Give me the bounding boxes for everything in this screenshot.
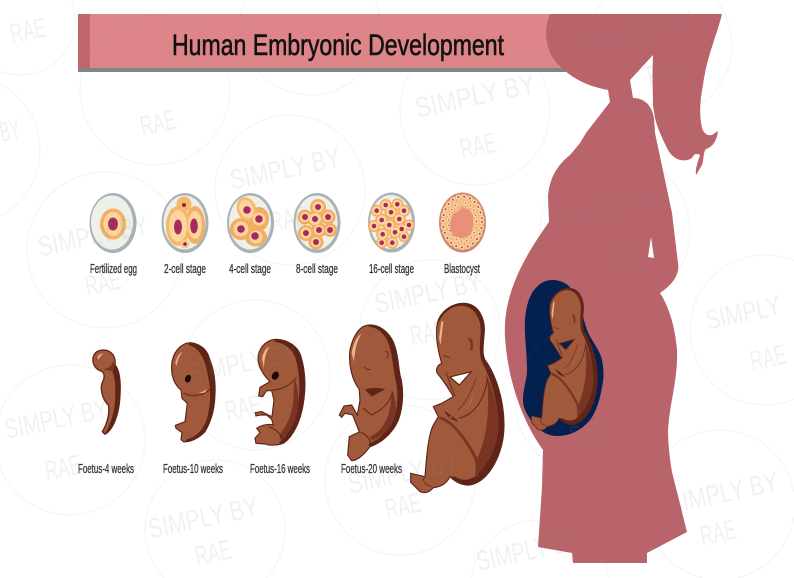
label: 16-cell stage bbox=[369, 262, 414, 276]
egg: 4-cell bbox=[227, 193, 274, 276]
watermarks: RAE bbox=[382, 487, 424, 525]
egg: 8-cell bbox=[294, 193, 340, 276]
foetus 4 weeks bbox=[78, 350, 134, 476]
watermarks: SIMPLY BY bbox=[412, 68, 538, 124]
pregnant woman silhouette bbox=[505, 14, 722, 563]
watermarks: RAE bbox=[407, 314, 449, 352]
row: early cell stages bbox=[90, 192, 486, 276]
watermarks: RAE bbox=[567, 414, 609, 452]
watermarks: SIMPLY BY bbox=[580, 6, 696, 60]
watermarks: RAE bbox=[42, 449, 84, 487]
watermarks: SIMPLY BY bbox=[185, 336, 301, 390]
watermarks: RAE bbox=[599, 239, 641, 277]
row: foetus stages bbox=[78, 303, 504, 493]
watermarks: RAE bbox=[644, 54, 686, 92]
label: Foetus-4 weeks bbox=[78, 462, 134, 476]
egg: 16-cell bbox=[368, 192, 415, 276]
watermarks: SIMPLY BY bbox=[227, 142, 343, 196]
title banner bbox=[78, 14, 570, 72]
label: 2-cell stage bbox=[164, 262, 206, 276]
watermarks: SIMPLY BY bbox=[473, 525, 583, 577]
label: Fertilized egg bbox=[90, 262, 137, 276]
watermarks: SIMPLY BY bbox=[35, 209, 151, 263]
watermarks: SIMPLY BY bbox=[372, 266, 484, 319]
watermarks: RAE bbox=[457, 127, 499, 165]
egg: 2-cell bbox=[162, 193, 208, 276]
watermarks: RAE bbox=[82, 264, 124, 302]
label: Foetus-10 weeks bbox=[163, 462, 223, 476]
foetus large bbox=[411, 303, 504, 493]
label: Blastocyst bbox=[444, 262, 480, 276]
watermarks: SIMPLY BY bbox=[1, 393, 111, 445]
watermarks: RAE bbox=[137, 104, 179, 142]
label: Foetus-16 weeks bbox=[250, 462, 310, 476]
watermarks: RAE bbox=[7, 12, 49, 50]
label: 8-cell stage bbox=[296, 262, 338, 276]
title: Human Embryonic Development bbox=[172, 29, 505, 62]
egg: fertilized bbox=[90, 193, 137, 276]
foetus 20 weeks bbox=[339, 325, 403, 476]
watermarks: RAE bbox=[222, 389, 264, 427]
foetus 10 weeks bbox=[163, 343, 223, 476]
watermarks: SIMPLY BY bbox=[345, 446, 461, 500]
label: Foetus-20 weeks bbox=[341, 462, 402, 476]
foetus 16 weeks bbox=[250, 339, 310, 476]
womb fetus bbox=[532, 288, 597, 430]
watermarks: RAE bbox=[192, 534, 234, 572]
watermarks: SIMPLY BY bbox=[552, 181, 674, 236]
watermarks: RAE bbox=[267, 200, 309, 238]
watermarks: SIMPLY BY bbox=[145, 491, 261, 545]
blastocyst bbox=[439, 192, 486, 276]
womb bbox=[523, 280, 604, 436]
label: 4-cell stage bbox=[229, 262, 271, 276]
watermarks: RAE bbox=[697, 514, 739, 552]
